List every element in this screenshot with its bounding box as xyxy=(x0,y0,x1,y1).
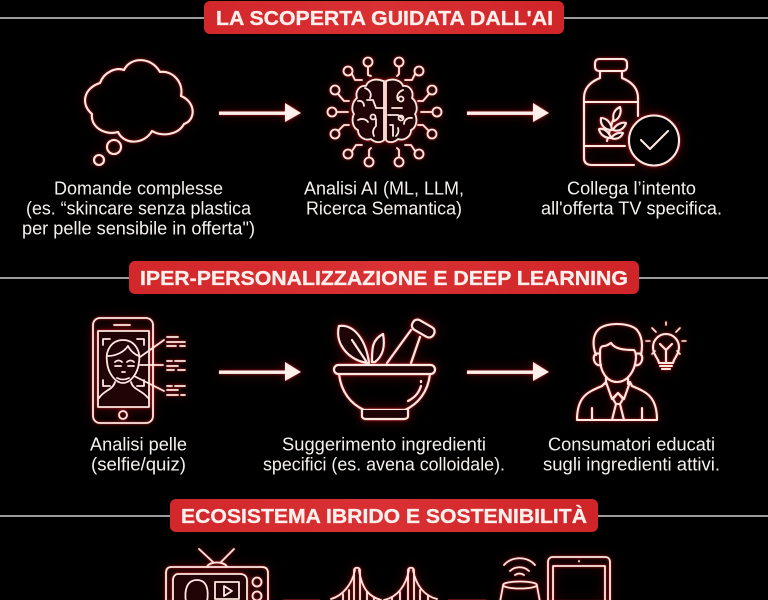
heading: ecosistema ibrido e sostenibilità: ECOSISTEMA IBRIDO E SOSTENIBILITÀ xyxy=(181,505,587,528)
icon: bridge xyxy=(331,568,437,600)
text: consumatori educati xyxy=(543,434,720,474)
text: consumatori educati: sugli ingredienti attivi. xyxy=(543,454,720,474)
icon: educated consumer with lightbulb xyxy=(577,322,686,420)
heading: la scoperta guidata dall'AI xyxy=(0,1,768,34)
arrow: brain to bottle xyxy=(467,103,549,122)
icon: television xyxy=(166,549,268,600)
text: collega l'intento: all'offerta TV specifica. xyxy=(541,198,722,218)
icon: bottle with check xyxy=(584,59,679,166)
arrow: cloud to brain xyxy=(219,103,301,122)
text: suggerimento ingredienti xyxy=(263,434,505,474)
text: analisi pelle: Analisi pelle xyxy=(90,434,187,454)
text: domande complesse xyxy=(22,178,255,238)
text: collega l'intento xyxy=(541,178,722,218)
icon: thought cloud xyxy=(85,60,193,165)
heading: iper-personalizzazione e deep learning: IPER-PERSONALIZZAZIONE E DEEP LEARNING xyxy=(140,268,628,290)
text: analisi AI: Analisi AI (ML, LLM, xyxy=(304,178,464,198)
heading: la scoperta guidata dall'AI: LA SCOPERTA GUIDATA DALL'AI xyxy=(216,8,553,30)
arrow: phone to mortar xyxy=(219,362,301,381)
icon: phone face scan xyxy=(93,318,185,423)
heading: iper-personalizzazione e deep learning xyxy=(0,261,768,294)
text: analisi pelle: (selfie/quiz) xyxy=(91,454,186,474)
text: suggerimento ingredienti: specifici (es. avena colloidale). xyxy=(263,454,505,474)
arrow: mortar to consumer xyxy=(467,362,549,381)
text: domande complesse: (es. “skincare senza plastica xyxy=(26,198,252,218)
arrow: bridge to devices xyxy=(448,599,486,600)
icon: smart speaker and tablet xyxy=(500,557,610,600)
text: analisi pelle xyxy=(90,434,187,474)
text: analisi AI: Ricerca Semantica) xyxy=(306,198,462,218)
text: consumatori educati: Consumatori educati xyxy=(548,434,715,454)
text: analisi AI xyxy=(304,178,464,218)
arrow: television to bridge xyxy=(283,599,320,600)
text: domande complesse: per pelle sensibile in offerta") xyxy=(22,218,255,238)
icon: mortar and pestle with leaves xyxy=(334,318,436,419)
heading: ecosistema ibrido e sostenibilità xyxy=(0,499,768,532)
text: suggerimento ingredienti: Suggerimento ingredienti xyxy=(282,434,486,454)
icon: AI brain xyxy=(328,58,442,166)
text: collega l'intento: Collega l’intento xyxy=(567,178,696,198)
text: domande complesse: Domande complesse xyxy=(54,178,223,198)
